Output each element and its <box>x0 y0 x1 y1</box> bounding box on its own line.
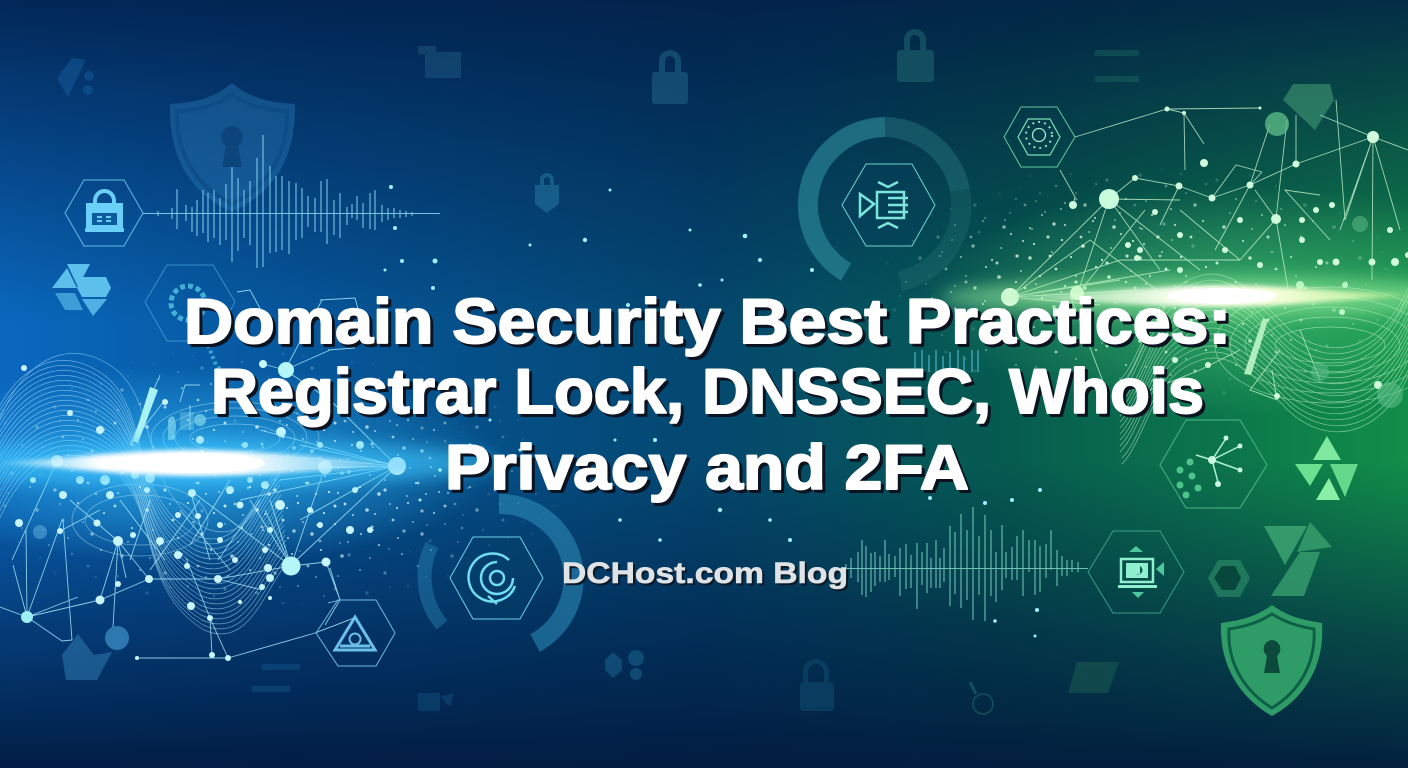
sparkle field left <box>4 352 559 611</box>
faint blobs bottom <box>605 650 644 680</box>
contour swirl near streak <box>72 402 319 556</box>
network lines left <box>0 290 397 658</box>
dim shapes top right <box>1244 84 1403 408</box>
connector to triangle hexagon <box>315 600 354 633</box>
denser sparkle <box>929 188 1212 344</box>
network nodes right <box>1001 106 1408 399</box>
faint bars bottom <box>252 664 300 692</box>
light streak right <box>940 277 1408 317</box>
faint bars top right <box>1095 50 1139 82</box>
dim shapes lower left <box>33 387 206 680</box>
fingerprint contour lines right <box>1118 270 1408 464</box>
pen stroke icon <box>1244 318 1268 375</box>
swirl below streak <box>1215 287 1408 403</box>
title: Registrar Lock, DNSSEC, Whois <box>211 357 1204 427</box>
pale blobs <box>168 412 206 440</box>
faint magnifier <box>970 682 993 714</box>
title <box>184 287 1231 503</box>
waveform left <box>143 135 440 268</box>
hexagon icon: triangle bottom left <box>316 600 395 666</box>
network lines right <box>1010 100 1408 400</box>
server icon <box>860 182 908 228</box>
denser sparkle <box>176 412 490 566</box>
faint background icons <box>57 29 1139 714</box>
faint parallelogram <box>1068 662 1119 693</box>
glow right <box>920 185 1408 415</box>
faint video icon bottom <box>418 693 454 711</box>
hexagon icon: gear <box>145 265 235 375</box>
hexagon icon: network blobs right <box>1160 420 1267 508</box>
faint padlock shield <box>535 173 559 213</box>
light streak left <box>0 441 500 485</box>
icon: triangle cluster <box>52 264 111 316</box>
faint padlock top right <box>897 29 934 82</box>
faint padlock top centre <box>652 50 688 104</box>
small hexagon outline icon <box>1208 560 1250 597</box>
shield right <box>1221 605 1322 716</box>
hexagon icon: lock <box>65 180 143 246</box>
constellation above title <box>237 290 360 370</box>
faint diamond icon top left <box>57 58 94 97</box>
fingerprint contour lines left <box>0 353 319 634</box>
faint bars behind title <box>915 350 978 372</box>
title: Privacy and 2FA <box>445 433 969 503</box>
bright pen stroke <box>133 387 158 443</box>
network nodes left <box>15 360 406 661</box>
ring and hexagon icon top right <box>808 127 961 281</box>
waveform right <box>840 507 1088 621</box>
hexagon icon: circuit top right <box>1004 107 1075 167</box>
scattered centre particles <box>384 185 1042 638</box>
icon: triangle cluster right <box>1295 436 1358 500</box>
faint shield left <box>170 83 295 212</box>
faint document icon <box>418 46 461 78</box>
icon: chevrons and parallelogram right <box>1264 522 1332 596</box>
subtitle: site name: DCHost.com Blog <box>562 557 848 590</box>
sparkle field right <box>886 168 1392 396</box>
hexagon icon: laptop <box>1088 531 1184 613</box>
faint padlock bottom <box>800 659 834 711</box>
concentric icon <box>469 553 515 604</box>
glow left <box>0 365 500 565</box>
ring and hexagon icon bottom <box>425 504 574 643</box>
title: Domain Security Best Practices: <box>184 287 1231 357</box>
